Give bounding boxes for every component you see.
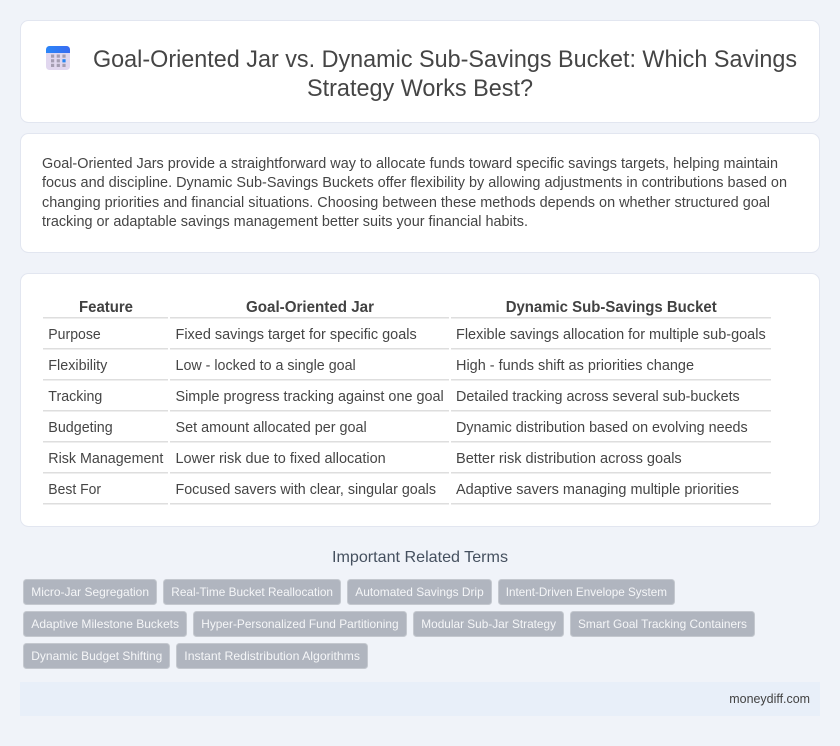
table row: Flexibility: High - funds shift as priorities change bbox=[456, 358, 694, 374]
tag: Smart Goal Tracking Containers bbox=[570, 612, 754, 636]
related terms tags bbox=[24, 580, 754, 668]
icon: calendar bbox=[46, 46, 70, 70]
tag: Hyper-Personalized Fund Partitioning bbox=[194, 612, 406, 636]
tag: Modular Sub-Jar Strategy bbox=[414, 612, 564, 636]
title bbox=[93, 46, 797, 102]
table header: Dynamic Sub-Savings Bucket bbox=[506, 299, 717, 316]
table row: Flexibility bbox=[48, 358, 694, 374]
tag: Automated Savings Drip: Automated Savings Drip bbox=[355, 585, 484, 599]
table row: Budgeting bbox=[48, 420, 748, 436]
panel: title card bbox=[20, 20, 820, 122]
tag: Dynamic Budget Shifting: Dynamic Budget Shifting bbox=[31, 649, 162, 663]
panel: comparison table bbox=[20, 274, 820, 526]
tag: Modular Sub-Jar Strategy: Modular Sub-Jar Strategy bbox=[421, 617, 556, 631]
tag: Intent-Driven Envelope System: Intent-Driven Envelope System bbox=[506, 585, 667, 599]
table row: Budgeting: Dynamic distribution based on evolving needs bbox=[456, 420, 748, 436]
table row: Risk Management: Risk Management bbox=[48, 451, 163, 467]
table row: Flexibility: Low - locked to a single goal bbox=[176, 358, 356, 374]
table row: Risk Management: Lower risk due to fixed allocation bbox=[176, 451, 386, 467]
tag: Intent-Driven Envelope System bbox=[498, 580, 674, 604]
tag: Micro-Jar Segregation bbox=[24, 580, 156, 604]
table row: Flexibility: Flexibility bbox=[48, 358, 108, 374]
table row: Purpose: Flexible savings allocation for multiple sub-goals bbox=[456, 327, 766, 343]
table row: Risk Management: Better risk distribution across goals bbox=[456, 451, 682, 467]
table row: Tracking: Detailed tracking across several sub-buckets bbox=[456, 389, 740, 405]
table row: Purpose: Fixed savings target for specific goals bbox=[176, 327, 417, 343]
table row: Risk Management bbox=[48, 451, 682, 467]
table row: Best For: Adaptive savers managing multiple priorities bbox=[456, 482, 739, 498]
tag: Micro-Jar Segregation: Micro-Jar Segregation bbox=[31, 585, 149, 599]
table row: Best For: Focused savers with clear, singular goals bbox=[176, 482, 436, 498]
tag: Instant Redistribution Algorithms: Instant Redistribution Algorithms bbox=[184, 649, 360, 663]
table header: Feature bbox=[79, 299, 133, 316]
title: Goal-Oriented Jar vs. Dynamic Sub-Savings Bucket: Which Savings bbox=[93, 46, 797, 73]
tag: Real-Time Bucket Reallocation bbox=[164, 580, 340, 604]
table row: Tracking: Tracking bbox=[48, 389, 102, 405]
footer: moneydiff.com bbox=[729, 692, 810, 706]
table row: Budgeting: Budgeting bbox=[48, 420, 113, 436]
text block: introduction paragraph: focus and discipline. Dynamic Sub-Savings Buckets offer flexibility by allowing adjustments in contributions based on bbox=[42, 175, 787, 191]
heading: important related terms: Important Related Terms bbox=[332, 549, 508, 566]
text block: introduction paragraph: Goal-Oriented Jars provide a straightforward way to allocate funds toward specific savings targets, helping maintain bbox=[42, 156, 778, 172]
tag: Hyper-Personalized Fund Partitioning: Hyper-Personalized Fund Partitioning bbox=[201, 617, 399, 631]
panel: introduction bbox=[20, 134, 820, 252]
table row: Purpose bbox=[48, 327, 766, 343]
tag: Smart Goal Tracking Containers: Smart Goal Tracking Containers bbox=[578, 617, 747, 631]
tag: Dynamic Budget Shifting bbox=[24, 644, 170, 668]
table row: Purpose: Purpose bbox=[48, 327, 101, 343]
text block: introduction paragraph: tracking or adaptable savings management better suits your financial habits. bbox=[42, 214, 528, 230]
table row: Best For: Best For bbox=[48, 482, 101, 498]
table row: Tracking: Simple progress tracking against one goal bbox=[176, 389, 444, 405]
text block: introduction paragraph bbox=[42, 156, 787, 230]
tag: Adaptive Milestone Buckets bbox=[24, 612, 186, 636]
table row: Tracking bbox=[48, 389, 740, 405]
tag: Real-Time Bucket Reallocation: Real-Time Bucket Reallocation bbox=[171, 585, 333, 599]
tag: Adaptive Milestone Buckets: Adaptive Milestone Buckets bbox=[31, 617, 179, 631]
tag: Automated Savings Drip bbox=[348, 580, 492, 604]
footer bbox=[20, 682, 820, 716]
tag: Instant Redistribution Algorithms bbox=[176, 644, 368, 668]
table header: Goal-Oriented Jar bbox=[246, 299, 374, 316]
table row: Budgeting: Set amount allocated per goal bbox=[176, 420, 367, 436]
title: Strategy Works Best? bbox=[307, 75, 533, 102]
text block: introduction paragraph: changing priorities and financial situations. Choosing between these methods depends on whether structured goal bbox=[42, 195, 770, 211]
table row: Best For bbox=[48, 482, 739, 498]
table header bbox=[79, 299, 717, 316]
